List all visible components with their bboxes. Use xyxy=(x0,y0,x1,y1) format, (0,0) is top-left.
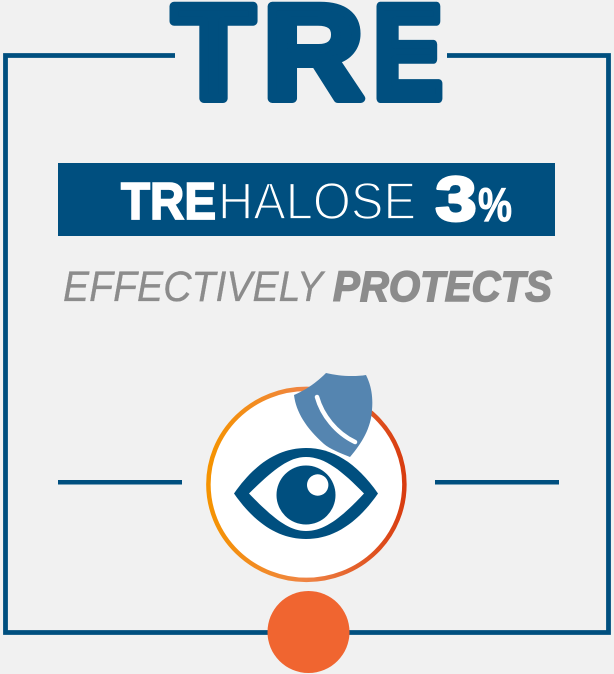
title xyxy=(172,0,443,128)
eye badge ring xyxy=(208,389,404,580)
left connector line xyxy=(58,480,182,484)
icon: eye xyxy=(234,448,378,539)
banner text: TREHALOSE xyxy=(121,173,416,231)
subtitle: PROTECTS xyxy=(333,263,552,311)
banner text: 3% xyxy=(436,166,512,234)
banner text: 3%: 3 xyxy=(436,166,476,234)
banner xyxy=(58,163,555,236)
subtitle xyxy=(63,263,552,311)
icon: shield xyxy=(294,373,372,457)
right connector line xyxy=(435,480,559,484)
banner text: 3%: % xyxy=(478,178,512,231)
subtitle: EFFECTIVELY xyxy=(63,263,326,311)
banner text: TREHALOSE: HALOSE xyxy=(218,173,416,231)
banner text: TREHALOSE: TRE xyxy=(121,173,216,231)
orange dot xyxy=(268,591,350,673)
